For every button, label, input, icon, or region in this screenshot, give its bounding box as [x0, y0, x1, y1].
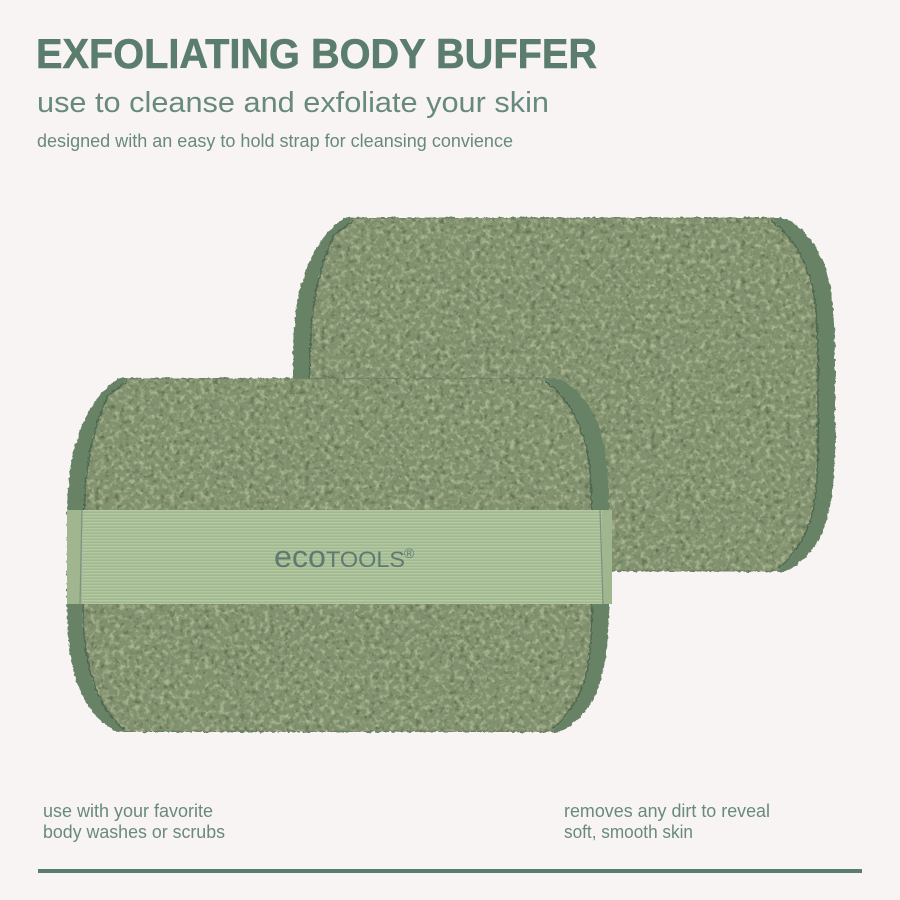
- title: EXFOLIATING BODY BUFFER: [36, 30, 597, 77]
- ecotools logo: eco: [274, 539, 326, 574]
- bottom rule: [38, 869, 862, 873]
- front sponge: [67, 378, 609, 732]
- subtitle: use to cleanse and exfoliate your skin: [37, 87, 549, 119]
- elastic strap: [67, 510, 612, 604]
- strap stitching: [80, 510, 603, 604]
- right caption: removes any dirt to reveal: [564, 801, 770, 821]
- strap band: [82, 510, 602, 604]
- ecotools logo: [274, 539, 415, 574]
- right caption: soft, smooth skin: [564, 822, 693, 842]
- back sponge: [293, 218, 835, 572]
- supporting line: designed with an easy to hold strap for cleansing convience: [37, 130, 513, 151]
- ecotools logo: ®: [404, 545, 415, 561]
- left caption: use with your favorite: [43, 801, 213, 821]
- strap side tabs: [67, 510, 612, 604]
- ecotools logo: TOOLS: [326, 547, 405, 572]
- left caption: body washes or scrubs: [43, 822, 225, 842]
